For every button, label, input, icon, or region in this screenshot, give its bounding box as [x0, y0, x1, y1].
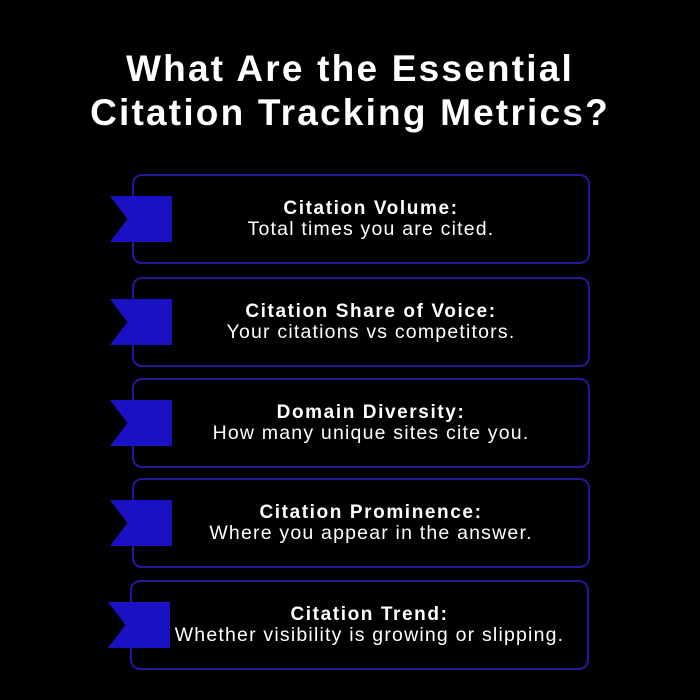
text: citation volume: Total times you are cited.	[248, 218, 494, 240]
text: trend	[174, 604, 564, 646]
text: share of voice: Your citations vs competitors.	[227, 321, 515, 343]
text: domain diversity	[213, 402, 529, 444]
card: domain diversity	[132, 378, 590, 468]
text: domain diversity: How many unique sites cite you.	[213, 422, 529, 444]
text: prominence: Where you appear in the answer.	[209, 522, 533, 544]
title: Citation Tracking Metrics?	[90, 92, 610, 133]
text: trend: Whether visibility is growing or slipping.	[175, 624, 564, 646]
ribbon icon 1	[110, 196, 172, 242]
card: trend	[130, 580, 589, 670]
text: citation volume: Citation Volume:	[283, 198, 459, 219]
text: share of voice	[227, 301, 515, 343]
text: domain diversity: Domain Diversity:	[277, 402, 465, 423]
card: citation volume	[132, 174, 590, 264]
title	[90, 48, 610, 133]
card: share of voice	[132, 277, 590, 367]
ribbon icon 2	[110, 299, 172, 345]
text: trend: Citation Trend:	[290, 604, 449, 625]
text: prominence: Citation Prominence:	[259, 502, 483, 523]
text: share of voice: Citation Share of Voice:	[245, 301, 497, 322]
card: prominence	[132, 478, 590, 568]
ribbon icon 3	[110, 400, 172, 446]
title: What Are the Essential	[126, 48, 574, 89]
ribbon icon 5	[108, 602, 170, 648]
ribbon icon 4	[110, 500, 172, 546]
text: citation volume	[248, 198, 494, 240]
text: prominence	[209, 502, 533, 544]
